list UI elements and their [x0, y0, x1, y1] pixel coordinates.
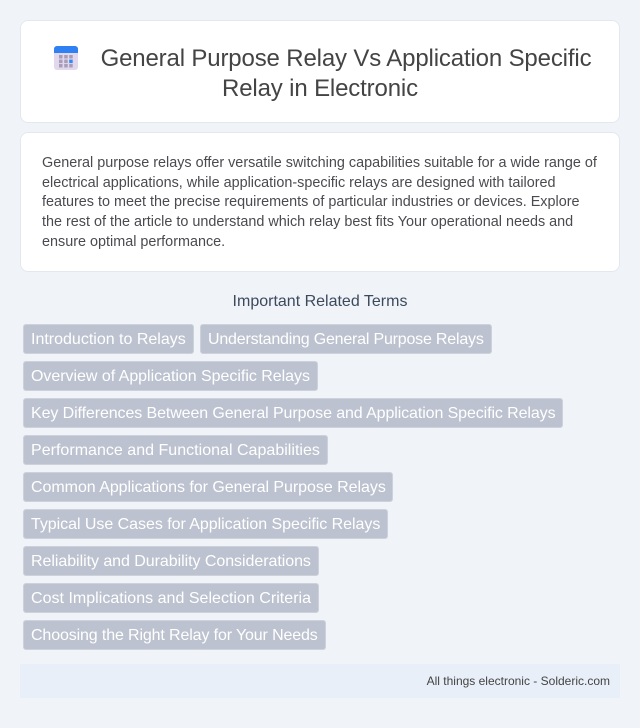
tag: Common Applications: Common Applications for General Purpose Relays	[31, 479, 386, 496]
description text	[42, 155, 597, 250]
tag: Common Applications	[23, 472, 393, 502]
icon: calendar grid	[54, 46, 78, 70]
footer text: All things electronic - Solderic.com	[427, 674, 610, 688]
description card	[20, 132, 620, 272]
tag: Introduction to Relays: Introduction to Relays	[31, 331, 186, 348]
related terms heading: Important Related Terms	[233, 293, 407, 310]
tag: Understanding General Purpose Relays: Understanding General Purpose Relays	[208, 331, 484, 348]
description text: General purpose relays offer versatile switching capabilities suitable for a wide range of	[42, 155, 597, 171]
tag: Typical Use Cases	[23, 509, 388, 539]
tag: Overview of Application Specific Relays: Overview of Application Specific Relays	[31, 368, 310, 385]
description text: ensure optimal performance.	[42, 234, 225, 250]
tag: Reliability and Durability	[23, 546, 319, 576]
description text: electrical applications, while application-specific relays are designed with tailored	[42, 175, 556, 191]
tag: Performance and Functional Capabilities: Performance and Functional Capabilities	[31, 442, 320, 459]
header card	[20, 20, 620, 123]
tag: Typical Use Cases: Typical Use Cases for Application Specific Relays	[31, 516, 380, 533]
tag: Understanding General Purpose Relays	[200, 324, 492, 354]
description text: features to meet the precise requirements of particular industries or devices. Explore	[42, 194, 580, 210]
tag: Performance and Functional Capabilities	[23, 435, 328, 465]
footer bar	[20, 664, 620, 698]
tag: Key Differences: Key Differences Between General Purpose and Application Specific Relays	[31, 405, 555, 422]
tag: Introduction to Relays	[23, 324, 194, 354]
tag: Choosing the Right Relay	[23, 620, 326, 650]
tag: Key Differences	[23, 398, 563, 428]
tag: Overview of Application Specific Relays	[23, 361, 318, 391]
title	[101, 45, 591, 102]
title: Relay in Electronic	[222, 75, 418, 102]
tag: Cost Implications	[23, 583, 319, 613]
title: General Purpose Relay Vs Application Specific	[101, 45, 591, 72]
tag: Reliability and Durability: Reliability and Durability Considerations	[31, 553, 311, 570]
tag: Choosing the Right Relay: Choosing the Right Relay for Your Needs	[31, 627, 318, 644]
description text: the rest of the article to understand which relay best fits Your operational needs and	[42, 214, 573, 230]
tag: Cost Implications: Cost Implications and Selection Criteria	[31, 590, 311, 607]
